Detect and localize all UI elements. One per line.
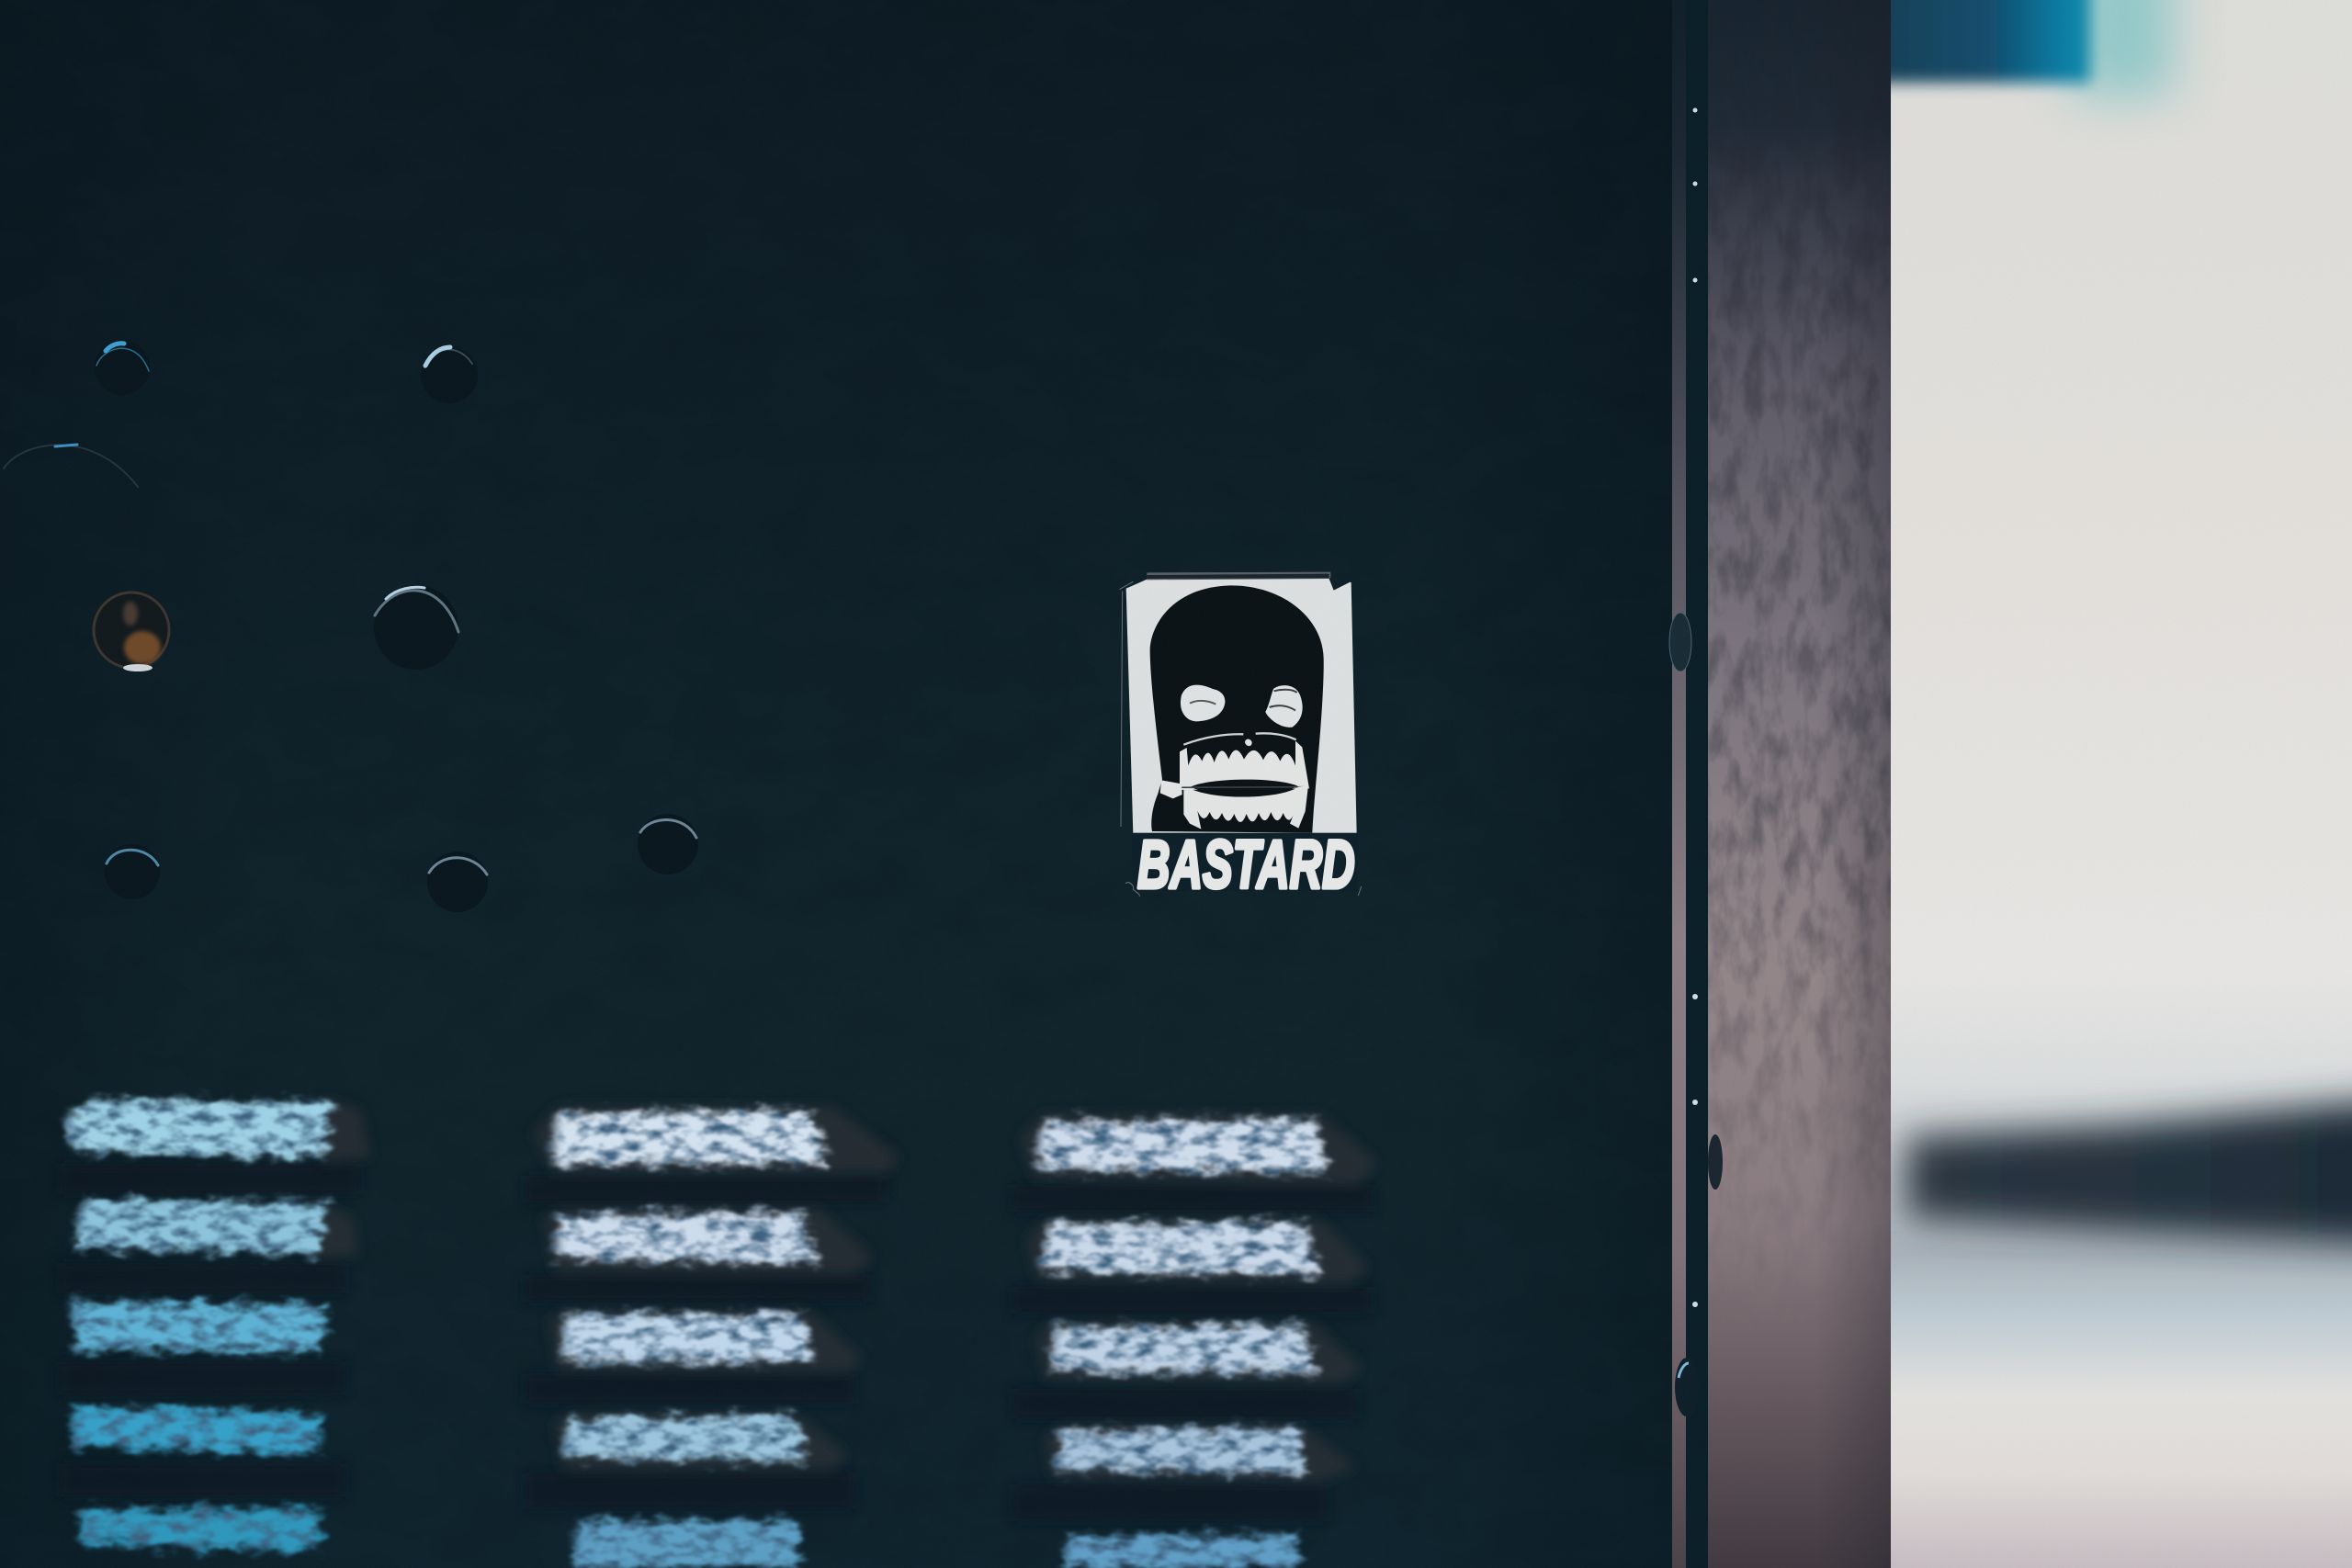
blurred light background on the right — [1874, 0, 2352, 1568]
slat 4 — [562, 1416, 807, 1461]
right vent column — [1035, 1119, 1328, 1568]
rivet top left — [95, 340, 150, 395]
hole with amber reflection — [94, 592, 169, 671]
speckled edge strip — [1672, 0, 1686, 1568]
zipper mouth — [1160, 733, 1309, 829]
slat 4 — [1056, 1427, 1305, 1472]
left eye — [1181, 685, 1225, 721]
upper teeth — [1180, 741, 1309, 790]
sticker — [1119, 572, 1362, 903]
large faint rivet ring — [4, 445, 138, 487]
blurred blue sign at the top — [1874, 0, 2173, 96]
lower teeth — [1183, 785, 1308, 829]
rivet centre — [374, 585, 458, 670]
dark metal panel — [0, 0, 1674, 1568]
slat 3 — [71, 1302, 324, 1353]
zipper pull — [1160, 780, 1182, 798]
slat 3 — [1050, 1325, 1317, 1374]
slat 2 — [555, 1212, 818, 1263]
slat 2 — [1041, 1223, 1320, 1275]
slat 1 — [64, 1100, 333, 1157]
nose — [1245, 739, 1252, 746]
balaclava head — [1150, 585, 1324, 833]
mauve metal slopes around the slats — [308, 1098, 1377, 1482]
open mouth — [1191, 780, 1297, 795]
outer lip — [1183, 733, 1296, 745]
metal column on the right — [1669, 0, 1891, 1568]
slat 1 — [1035, 1119, 1328, 1173]
dark recesses behind the vents — [60, 1164, 1373, 1521]
rivet lower left — [105, 844, 160, 899]
slat 2 — [72, 1200, 327, 1254]
right eye — [1265, 685, 1303, 728]
slat 1 — [552, 1110, 828, 1164]
rivet lower centre — [427, 852, 488, 912]
left vent column — [64, 1100, 333, 1551]
sticker white paper — [1126, 578, 1357, 889]
blurred dark horizontal band — [1907, 1099, 2352, 1246]
slat 5 — [1062, 1536, 1299, 1568]
dark backing behind the label — [1133, 833, 1358, 891]
middle vent column — [552, 1110, 828, 1568]
black groove — [1686, 0, 1708, 1568]
slat 5 — [78, 1508, 321, 1551]
slat 3 — [561, 1314, 813, 1361]
water drops on the groove — [1669, 108, 1723, 1416]
louver vents — [60, 1098, 1377, 1568]
slat 5 — [570, 1521, 801, 1568]
rivets and holes on the panel — [4, 340, 698, 912]
torn sticker corner — [1329, 572, 1353, 591]
sticker label: BASTARD: BASTARD — [1137, 826, 1355, 903]
rivet lower right — [638, 814, 698, 874]
rivet top middle — [421, 346, 478, 403]
slat 4 — [71, 1406, 321, 1455]
peeling edge marks — [1119, 581, 1362, 897]
